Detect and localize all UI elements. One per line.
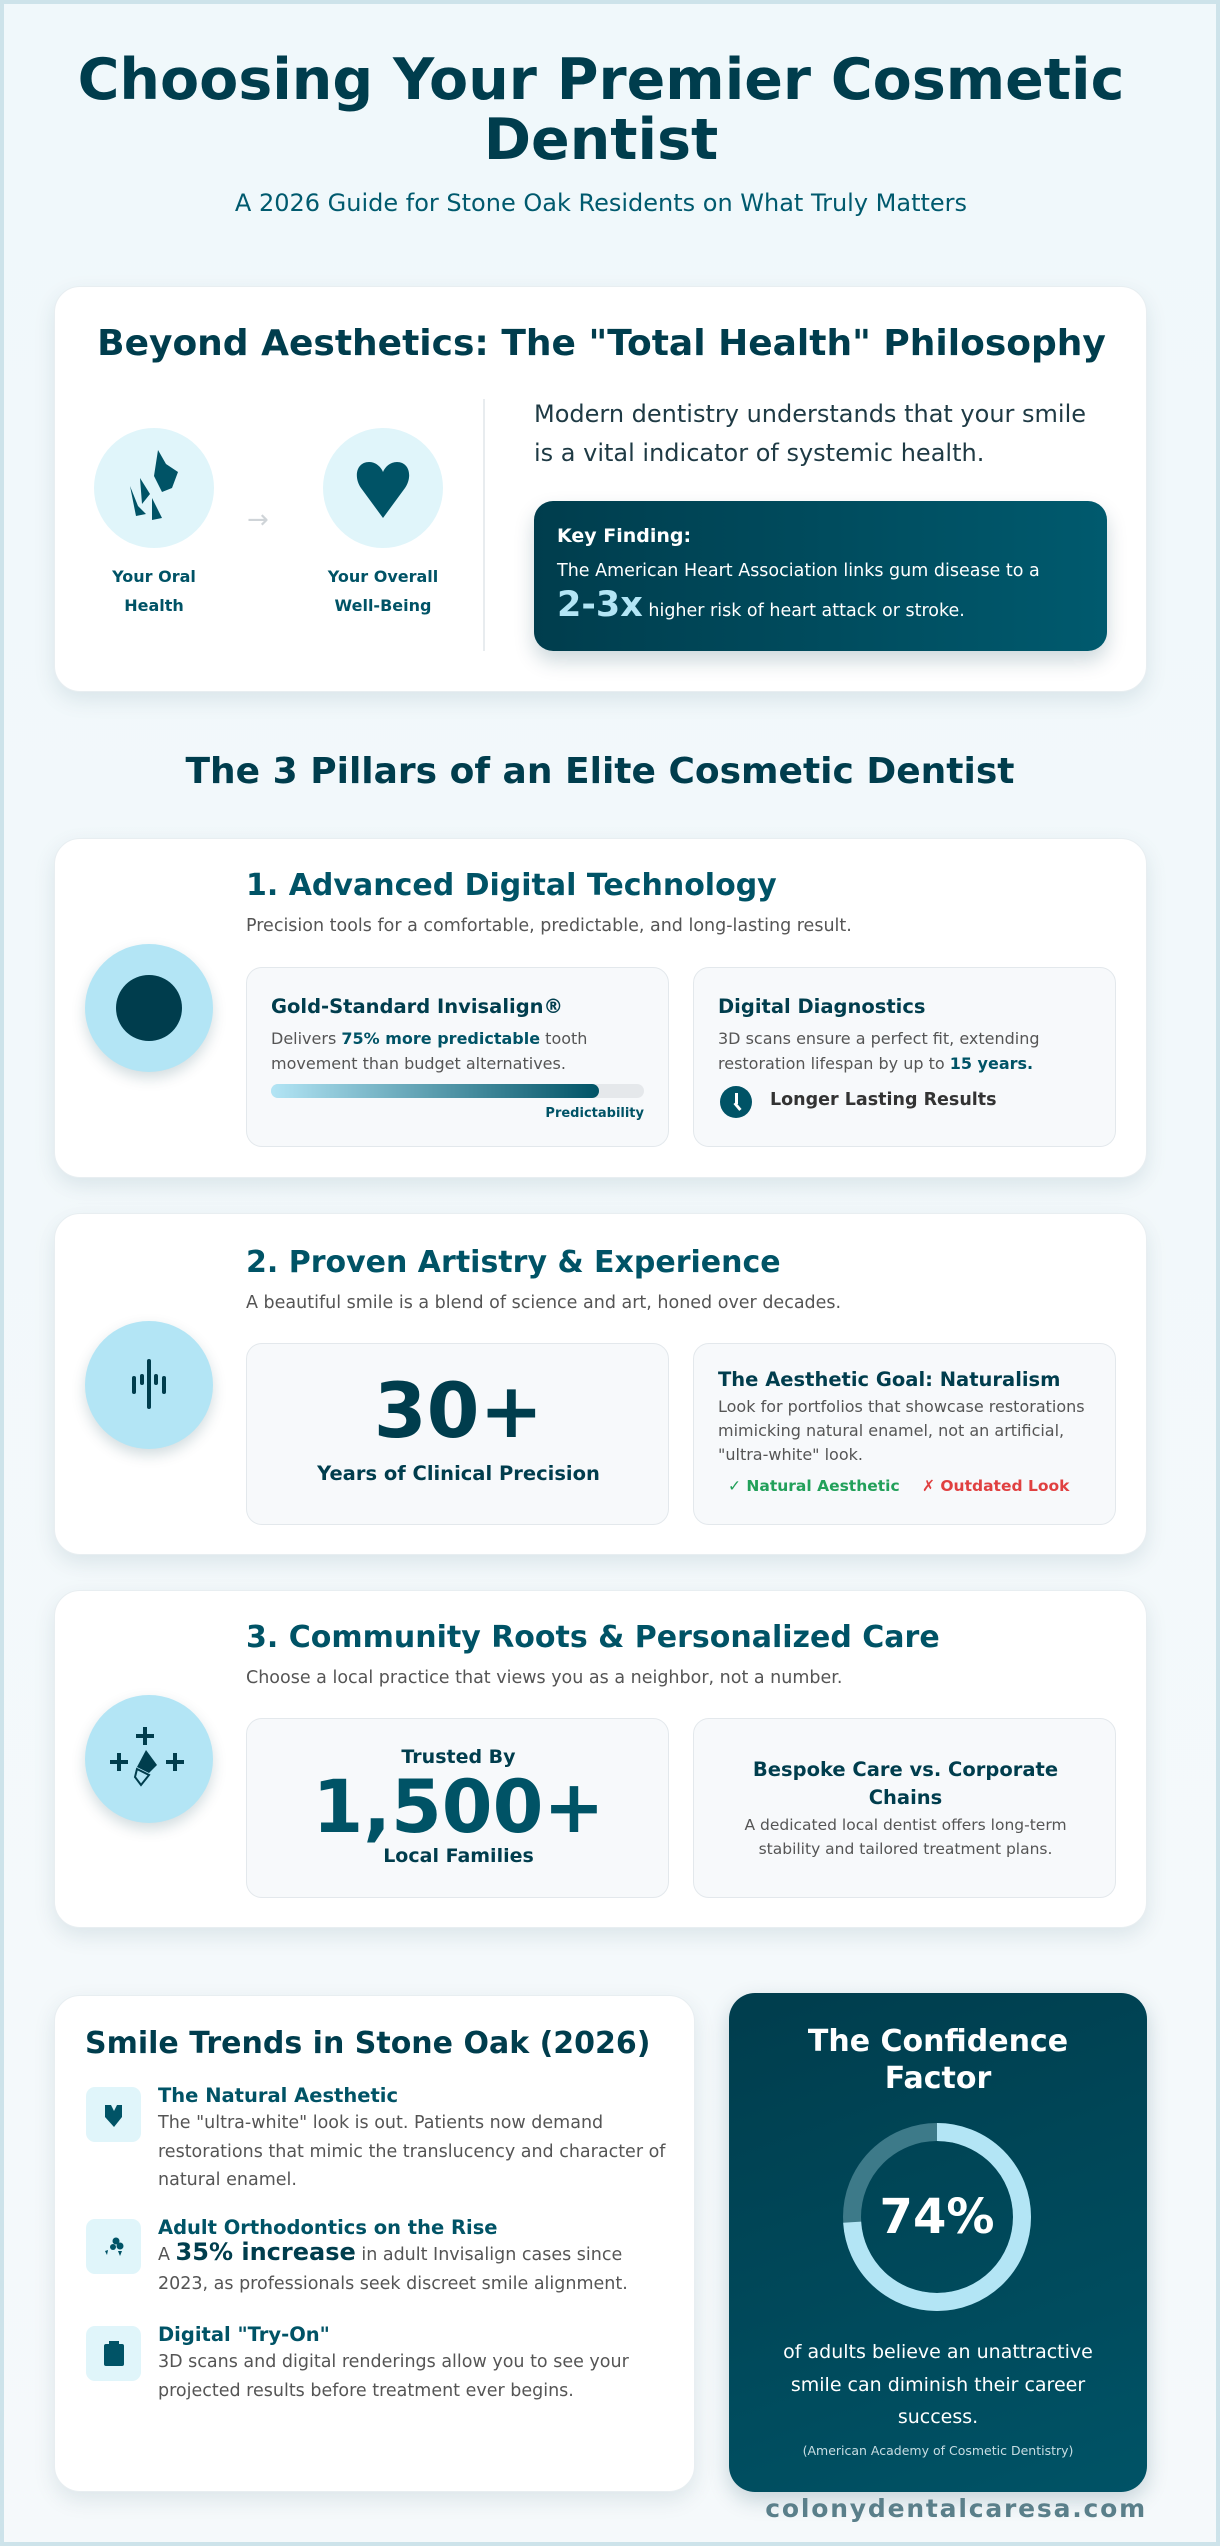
sub card: diagnostics: Longer Lasting Results: [770, 1090, 997, 1110]
footer url: colonydentalcaresa.com: [765, 2494, 1147, 2523]
panel: confidence factor: [729, 1993, 1147, 2492]
sub card: naturalism: ✗ Outdated Look: [922, 1477, 1069, 1495]
sub card: 1500 families: 1,500+: [312, 1765, 605, 1850]
sub card: invisalign: Delivers 75% more predictable tooth movement than budget alternatives.: [271, 1029, 587, 1073]
heading: The Confidence: [808, 2024, 1068, 2059]
sub card: 1500 families: Trusted By: [401, 1746, 516, 1768]
panel: pillar 3: [54, 1590, 1147, 1928]
stat text: of adults believe an unattractive smile can diminish their career success.: [783, 2341, 1093, 2428]
sub card: 30+ years: 30+: [374, 1366, 543, 1455]
icon: artistry: [85, 1321, 213, 1449]
label: overall well-being: [328, 567, 438, 615]
trend: adult orthodontics: A 35% increase in adult Invisalign cases since 2023, as professionals seek discreet smile alignment.: [158, 2238, 628, 2294]
icon: heart: [323, 428, 443, 548]
trend: natural aesthetic: The Natural Aesthetic: [158, 2084, 398, 2107]
pillar title: 2. Proven Artistry & Experience: [246, 1245, 781, 1280]
sub card: naturalism: Look for portfolios that showcase restorations mimicking natural enamel, not an artificial, "ultra-white" look.: [718, 1397, 1085, 1464]
pillar title: 1. Advanced Digital Technology: [246, 868, 777, 903]
sub card: diagnostics: Digital Diagnostics: [718, 995, 926, 1018]
title: Choosing Your Premier Cosmetic: [78, 47, 1124, 113]
subtitle: A 2026 Guide for Stone Oak Residents on What Truly Matters: [235, 189, 967, 217]
callout: key finding: [534, 501, 1107, 651]
sub card: bespoke care: A dedicated local dentist offers long-term stability and tailored treatment plans.: [744, 1816, 1067, 1858]
trend: digital try-on: [86, 2323, 629, 2400]
sub card: invisalign: [246, 967, 669, 1147]
panel: pillar 2: [54, 1213, 1147, 1555]
sub card: diagnostics: 3D scans ensure a perfect fit, extending restoration lifespan by up to 15 years.: [718, 1029, 1040, 1073]
sub card: diagnostics: [693, 967, 1116, 1147]
pillar subtitle: A beautiful smile is a blend of science and art, honed over decades.: [246, 1293, 841, 1313]
pillar title: 3. Community Roots & Personalized Care: [246, 1620, 940, 1655]
panel: total health: [54, 286, 1147, 692]
donut chart: 74%: 74%: [880, 2189, 994, 2245]
label: overall well-being: Well-Being: [335, 596, 431, 615]
donut chart: 74%: [843, 2123, 1031, 2311]
source: (American Academy of Cosmetic Dentistry): [803, 2443, 1073, 2458]
title: Dentist: [484, 107, 718, 173]
sub card: naturalism: [693, 1343, 1116, 1525]
icon: community: [85, 1695, 213, 1823]
trend: natural aesthetic: [86, 2084, 666, 2190]
sub card: naturalism: ✓ Natural Aesthetic: [728, 1477, 900, 1495]
label: oral health: [112, 567, 196, 615]
title: [78, 47, 1124, 173]
pillar subtitle: Choose a local practice that views you as a neighbor, not a number.: [246, 1668, 842, 1688]
label: oral health: Your Oral: [112, 567, 196, 586]
arrow: →: [247, 505, 269, 535]
panel: smile trends: [54, 1995, 695, 2492]
text: modern dentistry: is a vital indicator of systemic health.: [534, 439, 984, 467]
panel: pillar 1: [54, 838, 1147, 1178]
sub card: naturalism: The Aesthetic Goal: Naturalism: [718, 1368, 1060, 1391]
heading: Factor: [885, 2061, 991, 2096]
trend: natural aesthetic: The "ultra-white" look is out. Patients now demand restorations that mimic the translucency and character of natural enamel.: [158, 2113, 665, 2190]
callout: key finding: Key Finding:: [557, 525, 691, 547]
heading: Beyond Aesthetics: The "Total Health" Philosophy: [97, 323, 1106, 364]
trend: digital try-on: Digital "Try-On": [158, 2323, 330, 2346]
sub card: invisalign: Gold-Standard Invisalign®: [271, 995, 563, 1018]
trend: adult orthodontics: [86, 2216, 628, 2294]
heading: Smile Trends in Stone Oak (2026): [85, 2026, 651, 2061]
icon: digital: [85, 944, 213, 1072]
heading: 3 pillars: The 3 Pillars of an Elite Cosmetic Dentist: [186, 751, 1014, 792]
sub card: 30+ years: Years of Clinical Precision: [317, 1462, 600, 1485]
sub card: invisalign: Predictability: [545, 1106, 644, 1121]
sub card: 1500 families: [246, 1718, 669, 1898]
trend: digital try-on: 3D scans and digital renderings allow you to see your projected results before treatment ever begins.: [158, 2352, 629, 2400]
heading: [808, 2024, 1068, 2096]
label: overall well-being: Your Overall: [328, 567, 438, 586]
sub card: bespoke care: [693, 1718, 1116, 1898]
icon: clock: [720, 1086, 752, 1118]
icon: tooth: [94, 428, 214, 548]
callout: key finding: 2-3x higher risk of heart attack or stroke.: [557, 585, 965, 625]
progress bar: [271, 1084, 644, 1098]
sub card: 1500 families: Local Families: [383, 1845, 534, 1867]
text: modern dentistry: Modern dentistry understands that your smile: [534, 400, 1086, 428]
pillar subtitle: Precision tools for a comfortable, predictable, and long-lasting result.: [246, 916, 852, 936]
trend: adult orthodontics: Adult Orthodontics on the Rise: [158, 2216, 498, 2239]
callout: key finding: The American Heart Association links gum disease to a: [557, 561, 1040, 581]
label: oral health: Health: [124, 596, 184, 615]
sub card: 30+ years: [246, 1343, 669, 1525]
sub card: bespoke care: Bespoke Care vs. Corporate Chains: [753, 1758, 1058, 1809]
text: modern dentistry: [534, 400, 1086, 467]
